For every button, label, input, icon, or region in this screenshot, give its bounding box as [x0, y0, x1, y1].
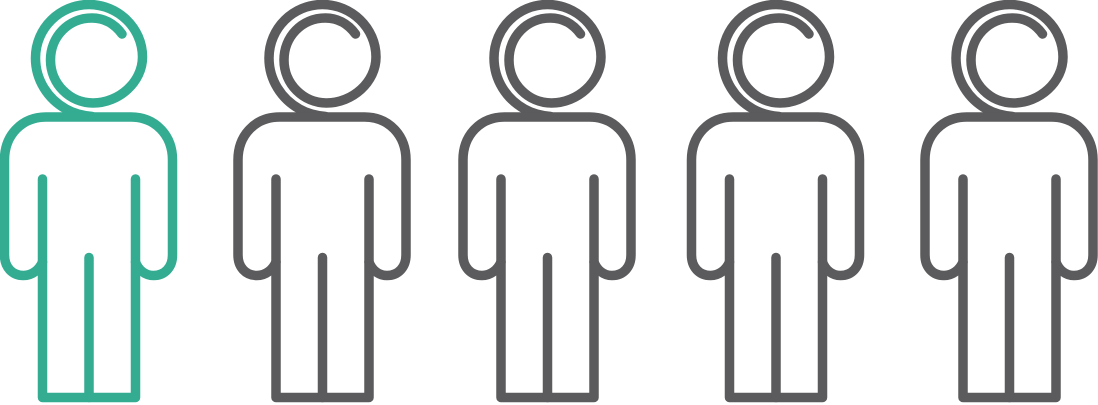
person 4: grey [692, 4, 860, 398]
person 1: teal highlighted [4, 4, 172, 398]
person 3: grey [463, 4, 631, 398]
person 2: grey [238, 4, 406, 398]
person 5: grey [925, 4, 1093, 398]
